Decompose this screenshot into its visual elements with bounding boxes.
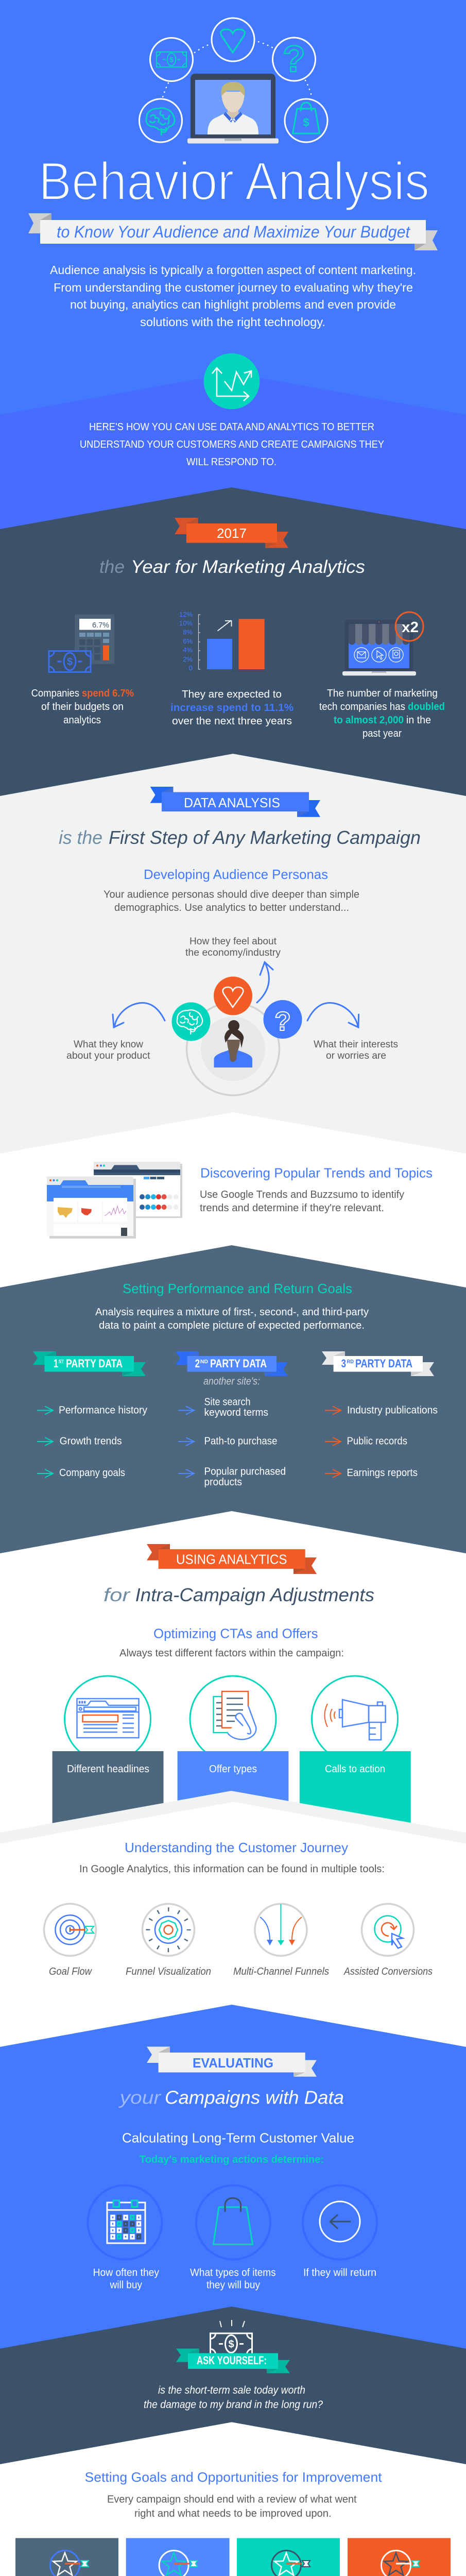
question text: the damage to my brand in the long run? [144, 2399, 323, 2411]
heading: setting goals and opportunities: Setting Goals and Opportunities for Improvement [84, 2469, 382, 2485]
ribbon: 1st party data: PARTY DATA [66, 1357, 123, 1370]
heading: calculating long-term customer value: Calculating Long-Term Customer Value [122, 2130, 354, 2146]
icon: heart circle [212, 18, 254, 61]
icon: laptop with person [187, 74, 279, 143]
title: Behavior Analysis [39, 151, 429, 211]
section background: 2017 panel [0, 487, 466, 796]
icon: question circle: ? [283, 39, 305, 80]
persona labels: How they feel about [189, 936, 277, 947]
label [190, 2267, 276, 2291]
heading: is the First Step of Any Marketing Campaign: First Step of Any Marketing Campaign [109, 827, 421, 848]
heading: discovering popular trends: Discovering Popular Trends and Topics [200, 1165, 433, 1181]
ribbon: 2nd party data: PARTY DATA [210, 1357, 267, 1370]
bar chart: 12% [179, 611, 193, 618]
ribbon: ask yourself [176, 2349, 290, 2373]
trends description [200, 1189, 404, 1214]
label box: Calls to action [325, 1764, 385, 1775]
ribbon: 2017 [175, 518, 288, 548]
heading: the Year for Marketing Analytics: the [99, 557, 125, 577]
persona diagram [66, 936, 398, 1095]
icon: question bubble: ? [274, 1007, 291, 1037]
icon: storefront laptop [342, 612, 423, 675]
tool: goal flow [44, 1904, 96, 1977]
intro paragraph: solutions with the right technology. [140, 315, 325, 329]
icon: return arrow [303, 2185, 377, 2260]
icon: star target [50, 2550, 89, 2576]
ribbon: 2nd party data: ND [200, 1359, 208, 1365]
ribbon: 3rd party data: 3 [341, 1357, 346, 1370]
note: another site's: another site's: [203, 1376, 260, 1387]
bar chart: 10% [179, 619, 193, 627]
section background: trends panel [0, 1112, 466, 1287]
question text: is the short-term sale today worth [158, 2384, 305, 2396]
question box 3 [237, 2538, 340, 2576]
section background: evaluating panel [0, 2005, 466, 2349]
section background: intro band [0, 373, 466, 529]
icon: question circle [273, 38, 315, 81]
icon: analytics chart circle [204, 353, 260, 409]
stat text: analytics [63, 715, 101, 726]
arrows [113, 962, 359, 1027]
subtitle ribbon [28, 213, 438, 250]
stat text: in the [406, 715, 431, 726]
subheading: today's marketing actions: Today's marketing actions determine: [140, 2154, 324, 2165]
icon: calculator [75, 614, 114, 664]
stat text: to almost 2,000 [334, 715, 404, 726]
heading: is the First Step of Any Marketing Campaign: is the [59, 827, 102, 848]
list: 3rd party items [325, 1405, 438, 1479]
question box 1 [15, 2538, 118, 2576]
callout text: UNDERSTAND YOUR CUSTOMERS AND CREATE CAMPAIGNS THEY [80, 438, 384, 450]
hero illustration [139, 18, 327, 143]
goals description [95, 1307, 369, 1331]
ribbon: data analysis [150, 787, 320, 817]
ribbon: 1st party data [33, 1351, 146, 1376]
bar chart: 8% [183, 629, 193, 636]
stat text: The number of marketing [327, 688, 438, 699]
list: 2nd party items: Site search [204, 1396, 250, 1408]
stat text: increase spend to 11.1% [170, 702, 294, 714]
personas description: Your audience personas should dive deeper than simple [103, 889, 359, 901]
persona labels: What their interests [314, 1039, 398, 1050]
list: 1st party items [37, 1405, 147, 1479]
ribbon: 3rd party data: PARTY DATA [355, 1357, 412, 1370]
icon: calendar [88, 2185, 162, 2260]
improvement description [107, 2494, 357, 2519]
label: they will buy [206, 2279, 260, 2291]
icon: offer sheets in hand [190, 1676, 276, 1762]
stat 1: calculator and money [31, 614, 134, 726]
ribbon: 2017: 2017 [217, 526, 247, 541]
heading: understanding the customer journey: Understanding the Customer Journey [125, 1840, 348, 1855]
bar chart: 0 [189, 664, 193, 672]
section background: using analytics panel [0, 1511, 466, 1833]
label: will buy [110, 2279, 142, 2291]
subtitle ribbon: to Know Your Audience and Maximize Your Budget [57, 223, 410, 241]
persona labels: about your product [66, 1050, 150, 1061]
icon: question bubble [264, 1000, 302, 1039]
stat text: of their budgets on [41, 701, 124, 713]
ribbon: 3rd party data: RD [347, 1359, 354, 1365]
intro paragraph: not buying, analytics can highlight problems and even provide [70, 298, 396, 311]
bar chart [179, 611, 265, 672]
tool: multi-channel funnels [233, 1904, 329, 1977]
callout text: WILL RESPOND TO. [186, 456, 277, 468]
factor: how often [88, 2185, 162, 2291]
heading: for Intra-Campaign Adjustments: Intra-Campaign Adjustments [135, 1584, 374, 1605]
heading: the Year for Marketing Analytics: Year for Marketing Analytics [131, 557, 365, 577]
label: If they will return [303, 2267, 376, 2278]
label: What types of items [190, 2267, 276, 2278]
card: calls to action [300, 1676, 411, 1834]
intro paragraph: Audience analysis is typically a forgotten aspect of content marketing. [50, 263, 416, 277]
goals description: data to paint a complete picture of expected performance. [99, 1320, 365, 1331]
label: Goal Flow [49, 1966, 92, 1977]
personas description [103, 889, 359, 913]
icon: storefront laptop: x2 [402, 619, 419, 636]
stat text: tech companies has [319, 701, 405, 713]
stat text: They are expected to [182, 689, 282, 700]
question text [144, 2384, 323, 2411]
stat text [319, 688, 445, 739]
heading: setting performance and return goals: Setting Performance and Return Goals [123, 1281, 352, 1296]
list: 3rd party items: Industry publications [347, 1405, 438, 1416]
icon: megaphone [312, 1676, 398, 1762]
icon: brain bubble [172, 1003, 210, 1041]
label box: Different headlines [67, 1764, 149, 1775]
personas description: demographics. Use analytics to better understand... [114, 902, 349, 913]
intro paragraph [50, 263, 416, 329]
label box [53, 1751, 163, 1834]
card: offer types [178, 1676, 288, 1834]
hero background [0, 0, 466, 415]
icon: star target [159, 2550, 198, 2576]
ribbon: evaluating [147, 2046, 317, 2077]
section background: data analysis panel [0, 754, 466, 1154]
icon: star target [272, 2550, 310, 2576]
icon: heart bubble [214, 977, 252, 1015]
trends screenshots [47, 1162, 182, 1239]
list: 2nd party items: Popular purchased [204, 1466, 286, 1478]
screenshot: google trends [47, 1177, 136, 1239]
label [93, 2267, 159, 2291]
callout text [80, 421, 384, 468]
list: 1st party items: Performance history [59, 1405, 147, 1416]
icon: converging arrows [255, 1904, 307, 1956]
dotted connectors [163, 42, 312, 97]
stat text: Companies [31, 688, 79, 699]
goals description: Analysis requires a mixture of first-, second-, and third-party [95, 1307, 369, 1318]
bar chart: 6% [183, 637, 193, 645]
ribbon: 1st party data: 1 [54, 1357, 58, 1370]
bar chart: 2% [183, 655, 193, 663]
screenshot: buzzsumo [94, 1162, 182, 1218]
ribbon: 3rd party data [322, 1351, 434, 1376]
heading: for Intra-Campaign Adjustments: for [103, 1584, 131, 1605]
icon: bag [196, 2185, 270, 2260]
list: 1st party items: Company goals [59, 1467, 125, 1479]
icon: target [44, 1904, 96, 1956]
icon: money circle [150, 38, 193, 81]
section background: goals panel [0, 1245, 466, 1553]
persona labels: or worries are [326, 1050, 386, 1061]
ribbon: 2nd party data: 2 [195, 1357, 200, 1370]
stat text: doubled [408, 701, 445, 713]
list: 2nd party items: products [204, 1477, 242, 1488]
stat 3: laptop storefront [319, 612, 445, 739]
ribbon: using analytics [147, 1544, 317, 1574]
card: different headlines [53, 1676, 163, 1834]
question box 4 [348, 2538, 451, 2576]
journey description: In Google Analytics, this information can be found in multiple tools: [79, 1863, 385, 1875]
ribbon: 1st party data: ST [59, 1359, 64, 1365]
list: 2nd party items: Path-to purchase [204, 1435, 277, 1447]
improvement description: Every campaign should end with a review of what went [107, 2494, 357, 2505]
label: Assisted Conversions [343, 1966, 433, 1977]
icon: shopping bag circle [285, 99, 327, 142]
list: 2nd party items: keyword terms [204, 1407, 268, 1418]
ribbon: 2nd party data [176, 1351, 288, 1376]
icon: money with rays [210, 2320, 252, 2354]
callout text: HERE'S HOW YOU CAN USE DATA AND ANALYTICS TO BETTER [89, 421, 374, 433]
stat text [31, 688, 134, 726]
ribbon: using analytics: USING ANALYTICS [176, 1552, 287, 1567]
label box: Offer types [209, 1764, 257, 1775]
trends description: trends and determine if they're relevant. [200, 1202, 384, 1214]
bar chart: 4% [183, 646, 193, 654]
icon: brain circle [139, 99, 182, 142]
ring and person [186, 1003, 279, 1095]
improvement description: right and what needs to be improved upon. [134, 2508, 332, 2519]
label: How often they [93, 2267, 159, 2278]
stat 2: bar chart [170, 611, 294, 727]
ribbon: ask yourself: ASK YOURSELF: [197, 2354, 267, 2367]
tool: assisted conversions [343, 1904, 433, 1977]
icon: shopping bag circle: $ [303, 116, 309, 129]
section background: ask yourself panel [0, 2307, 466, 2464]
intro paragraph: From understanding the customer journey to evaluating why they're [54, 281, 413, 294]
list: 3rd party items: Earnings reports [347, 1467, 418, 1479]
list: 2nd party items [178, 1396, 286, 1488]
trends description: Use Google Trends and Buzzsumo to identify [200, 1189, 404, 1200]
label: Multi-Channel Funnels [233, 1966, 329, 1977]
question box 2 [126, 2538, 230, 2576]
icon: radiating rings [142, 1904, 195, 1956]
icon: calculator: 6.7% [92, 621, 109, 630]
label: Funnel Visualization [126, 1966, 211, 1977]
ribbon: data analysis: DATA ANALYSIS [184, 795, 280, 810]
list: 1st party items: Growth trends [60, 1435, 122, 1447]
persona labels: the economy/industry [185, 947, 281, 958]
ribbon: evaluating: EVALUATING [193, 2055, 273, 2071]
tool: funnel visualization [126, 1904, 211, 1977]
heading: optimizing CTAs and offers: Optimizing CTAs and Offers [153, 1626, 318, 1641]
stat text: spend 6.7% [82, 688, 134, 699]
section background: goals and improvement panel [0, 2422, 466, 2576]
list: 3rd party items: Public records [347, 1435, 407, 1447]
icon: cursor and cycle [361, 1904, 414, 1956]
section background: customer journey panel [0, 1802, 466, 2047]
section background: customer journey band [0, 1791, 466, 1844]
factor: item types [190, 2185, 276, 2291]
persona labels [66, 936, 398, 1061]
persona labels: What they know [74, 1039, 143, 1050]
heading: your Campaigns with Data: Campaigns with Data [165, 2087, 344, 2108]
factor: return [303, 2185, 377, 2278]
label box [178, 1751, 288, 1834]
heading: your Campaigns with Data: your [118, 2087, 162, 2108]
icon: money [48, 650, 92, 673]
heading: developing audience personas: Developing Audience Personas [144, 867, 328, 882]
optimizing description: Always test different factors within the campaign: [119, 1648, 344, 1659]
stat text: over the next three years [172, 716, 292, 727]
stat text: past year [363, 728, 402, 739]
icon: browser [65, 1676, 150, 1762]
stat text [170, 689, 294, 727]
label box [300, 1751, 411, 1834]
icon: star target [381, 2550, 420, 2576]
